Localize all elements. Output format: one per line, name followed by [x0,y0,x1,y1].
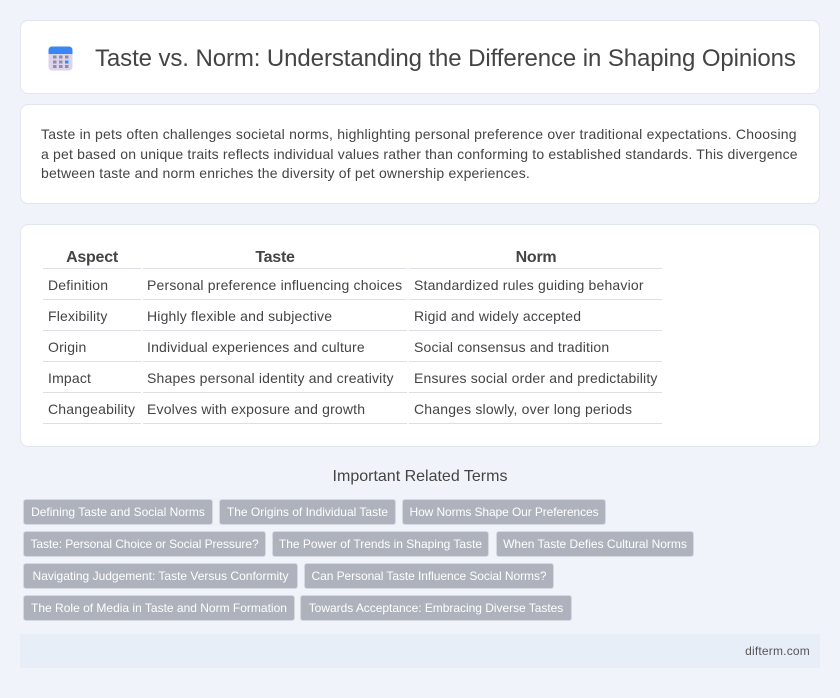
intro paragraph: Taste in pets often challenges societal norms, highlighting personal preference over traditional expectations. Choosing [41,126,797,142]
row: changeability: Evolves with exposure and growth [147,401,365,417]
row: origin: Social consensus and tradition [414,339,609,355]
table header: Aspect [66,249,118,266]
related term tags: The Power of Trends in Shaping Taste [279,537,482,551]
related term tags: The Role of Media in Taste and Norm Formation [31,601,287,615]
row: changeability [48,401,632,417]
comparison table panel [20,224,820,447]
table header [66,249,556,266]
row: impact: Ensures social order and predictability [414,370,658,386]
row: impact: Shapes personal identity and creativity [147,370,394,386]
row: impact: Impact [48,370,91,386]
row: origin: Individual experiences and culture [147,339,365,355]
row: changeability: Changes slowly, over long periods [414,401,632,417]
related term tags: Towards Acceptance: Embracing Diverse Tastes [309,601,563,615]
row: flexibility: Highly flexible and subjective [147,308,332,324]
row: impact [48,370,658,386]
row: flexibility: Rigid and widely accepted [414,308,581,324]
table header: Taste [255,249,295,266]
row: flexibility [48,308,581,324]
row: definition: Personal preference influencing choices [147,277,402,293]
intro text panel [20,104,820,204]
related term tags: Taste: Personal Choice or Social Pressure? [30,537,259,551]
row: definition: Definition [48,277,108,293]
row: origin [48,339,609,355]
table rules [43,268,662,424]
row: changeability: Changeability [48,401,135,417]
related term tags: Defining Taste and Social Norms [31,505,205,519]
footer bar [20,634,820,668]
row: origin: Origin [48,339,86,355]
related term tags: Navigating Judgement: Taste Versus Conformity [33,569,288,583]
related term tags: When Taste Defies Cultural Norms [503,537,687,551]
related term tags: How Norms Shape Our Preferences [410,505,598,519]
related term tags: The Origins of Individual Taste [227,505,388,519]
row: definition: Standardized rules guiding behavior [414,277,644,293]
table header: Norm [516,249,556,266]
intro paragraph: between taste and norm enriches the diversity of pet ownership experiences. [41,165,530,181]
intro paragraph: a pet based on unique traits reflects individual values rather than conforming to established standards. This divergence [41,146,798,162]
related term tags: Can Personal Taste Influence Social Norms? [312,569,546,583]
row: flexibility: Flexibility [48,308,108,324]
header card [20,20,820,94]
icon: calendar [48,46,72,70]
intro paragraph [41,126,798,181]
related terms heading: Important Related Terms [333,468,507,485]
row: definition [48,277,644,293]
footer source: difterm.com [745,644,810,658]
title: Taste vs. Norm: Understanding the Difference in Shaping Opinions [95,45,796,72]
related term tags [23,499,694,621]
